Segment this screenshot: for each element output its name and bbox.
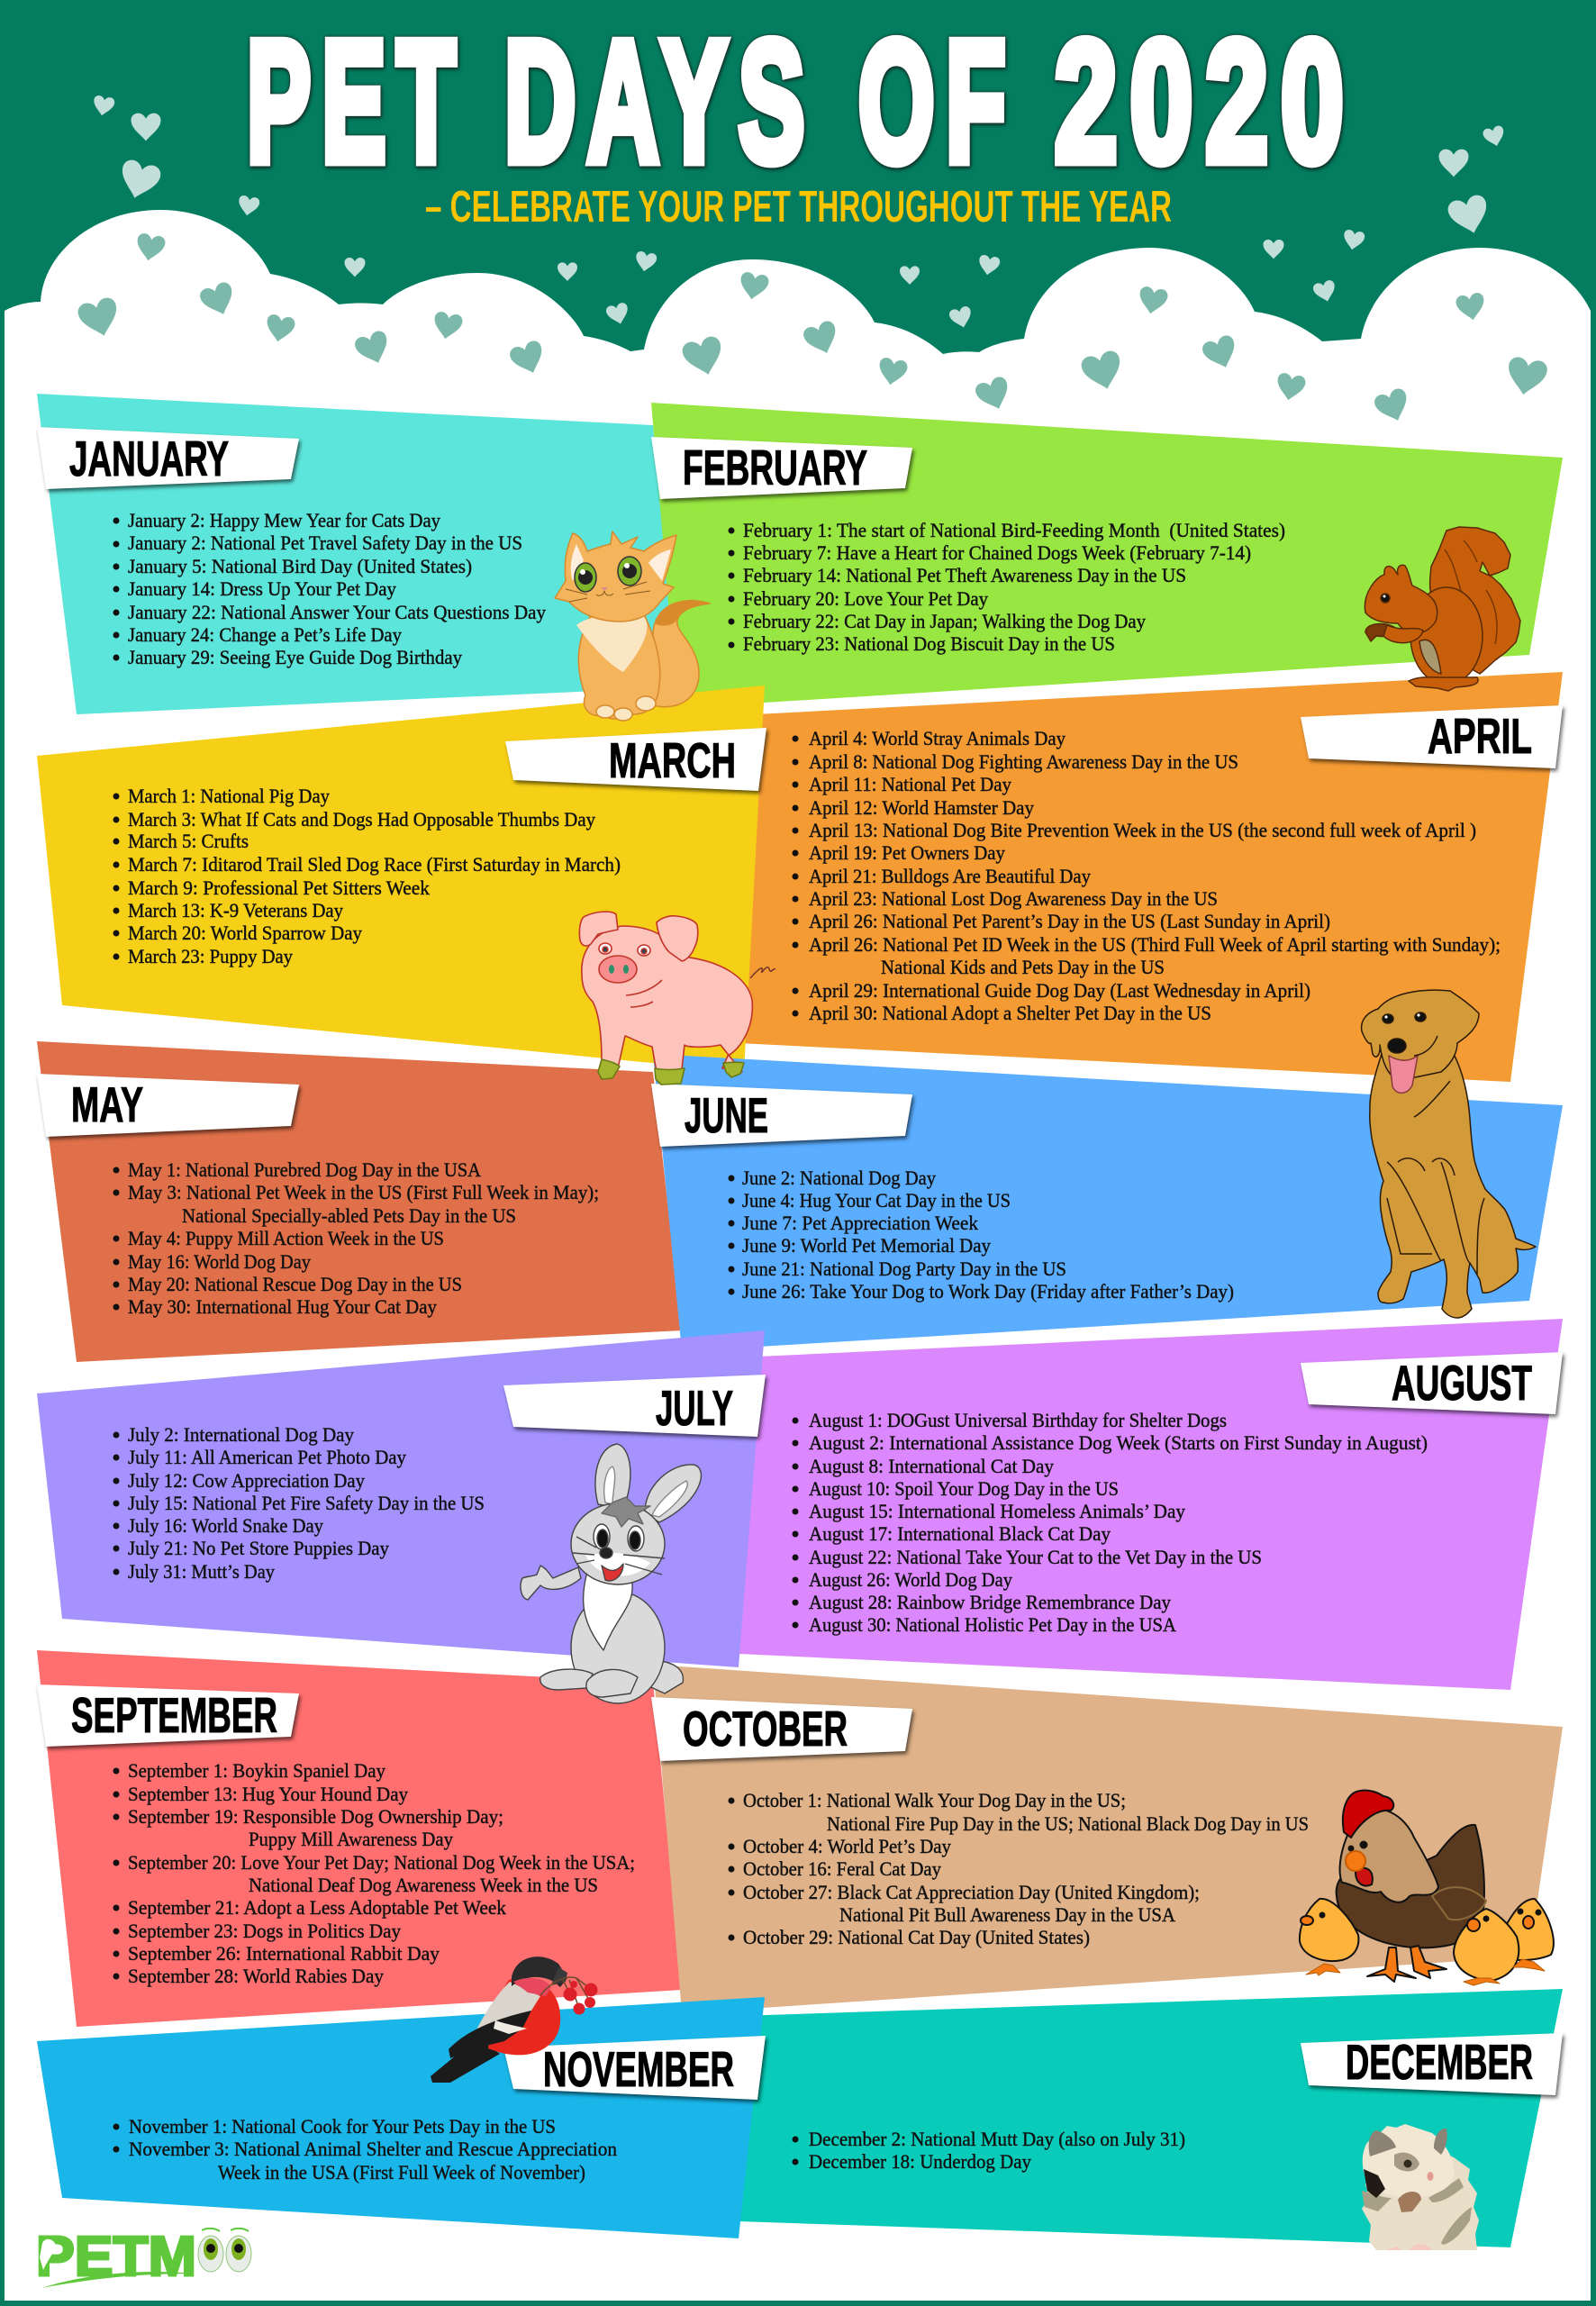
panel: November [37, 1997, 766, 2238]
list: June days: June 2: National Dog Day [742, 1167, 936, 1189]
panel: September [37, 1650, 682, 2027]
list: August days: August 26: World Dog Day [809, 1568, 1012, 1591]
heading: September: SEPTEMBER [71, 1687, 277, 1743]
icon: hen and chicks [1300, 1790, 1554, 1985]
list: September days: September 20: Love Your Pet Day; National Dog Week in the USA; [128, 1851, 635, 1874]
list: July days: July 2: International Dog Day [128, 1423, 354, 1446]
bullets [113, 1170, 119, 1307]
bullets [728, 1178, 735, 1292]
heading: August: AUGUST [1392, 1355, 1532, 1411]
list: March days: March 20: World Sparrow Day [128, 921, 362, 944]
list: July days: July 11: All American Pet Photo Day [128, 1446, 406, 1468]
list: January days: January 24: Change a Pet’s Life Day [128, 623, 402, 646]
icon: rabbit [521, 1444, 701, 1703]
icon: pig [579, 912, 775, 1085]
heading: April: APRIL [1428, 708, 1532, 764]
list: April days: April 26: National Pet ID Week in the US (Third Full Week of April starting with Sunday); [809, 933, 1501, 956]
list: September days [128, 1759, 635, 1987]
list: May days [128, 1158, 599, 1318]
title [247, 6, 1356, 197]
bullets [728, 1801, 735, 1938]
decorative hearts on white [76, 232, 1548, 426]
heading: May: MAY [71, 1076, 143, 1132]
bullets [113, 796, 119, 957]
heading: January: JANUARY [69, 431, 229, 486]
list: May days: May 4: Puppy Mill Action Week in the US [128, 1227, 444, 1249]
icon: hamster [1362, 2124, 1479, 2250]
list: February days: February 7: Have a Heart for Chained Dogs Week (February 7-14) [743, 541, 1251, 564]
list: October days: October 27: Black Cat Appreciation Day (United Kingdom); [743, 1881, 1200, 1903]
list: November days: November 3: National Animal Shelter and Rescue Appreciation [129, 2138, 617, 2160]
list: December days: December 18: Underdog Day [809, 2150, 1031, 2173]
list: April days: National Kids and Pets Day in the US [881, 956, 1165, 978]
list: March days [128, 785, 621, 967]
list: August days: August 10: Spoil Your Dog Day in the US [809, 1477, 1119, 1500]
panel: April [739, 672, 1563, 1082]
bullets [113, 521, 119, 658]
list: April days: April 21: Bulldogs Are Beautiful Day [809, 865, 1091, 887]
list: March days: March 7: Iditarod Trail Sled Dog Race (First Saturday in March) [128, 853, 621, 876]
list: April days: April 11: National Pet Day [809, 773, 1011, 795]
bullets [113, 1435, 119, 1572]
icon: squirrel [1365, 527, 1520, 691]
list: January days [128, 509, 546, 668]
panel: February [651, 403, 1563, 708]
list: April days: April 29: International Guide Dog Day (Last Wednesday in April) [809, 979, 1310, 1002]
list: September days: September 19: Responsible Dog Ownership Day; [128, 1805, 503, 1828]
panel: December [739, 1989, 1563, 2247]
heading: July: JULY [656, 1380, 733, 1436]
list: May days: May 16: World Dog Day [128, 1250, 311, 1273]
bullets [793, 1421, 798, 1625]
list: March days: March 23: Puppy Day [128, 945, 293, 967]
list: September days: National Deaf Dog Awareness Week in the US [249, 1874, 598, 1896]
list: June days: June 4: Hug Your Cat Day in the US [742, 1189, 1011, 1212]
list: January days: January 5: National Bird Day (United States) [128, 555, 472, 577]
list: August days: August 22: National Take Your Cat to the Vet Day in the US [809, 1546, 1262, 1568]
list: July days: July 15: National Pet Fire Safety Day in the US [128, 1492, 485, 1514]
list: September days: September 21: Adopt a Less Adoptable Pet Week [128, 1896, 506, 1919]
list: June days: June 21: National Dog Party Day in the US [742, 1257, 1066, 1280]
list: October days: October 29: National Cat Day (United States) [743, 1926, 1090, 1948]
bullets [793, 739, 798, 1013]
list: September days: September 1: Boykin Spaniel Day [128, 1759, 385, 1782]
list: May days: May 3: National Pet Week in the US (First Full Week in May); [128, 1181, 599, 1203]
list: April days: April 12: World Hamster Day [809, 796, 1034, 819]
list: April days: April 23: National Lost Dog Awareness Day in the US [809, 887, 1218, 910]
bullets [793, 2139, 798, 2162]
list: January days: January 14: Dress Up Your Pet Day [128, 577, 396, 600]
list: November days: November 1: National Cook for Your Pets Day in the US [129, 2115, 556, 2138]
list: March days: March 1: National Pig Day [128, 785, 330, 807]
list: October days: October 4: World Pet’s Day [743, 1835, 951, 1857]
list: April days: April 4: World Stray Animals Day [809, 727, 1066, 749]
panel: July [37, 1330, 766, 1667]
list: June days: June 7: Pet Appreciation Week [742, 1212, 978, 1234]
list: July days: July 21: No Pet Store Puppies Day [128, 1537, 389, 1559]
list: May days: May 30: International Hug Your Cat Day [128, 1295, 437, 1318]
title: 2020 [1055, 6, 1356, 197]
panel: January [37, 394, 677, 714]
list: January days: January 29: Seeing Eye Guide Dog Birthday [128, 646, 462, 668]
list: October days: National Fire Pup Day in the US; National Black Dog Day in US [827, 1812, 1309, 1835]
panel: October [651, 1665, 1563, 2013]
list: March days: March 13: K-9 Veterans Day [128, 899, 343, 921]
bullets [113, 1771, 119, 1976]
bullets [113, 2127, 119, 2149]
list: August days [809, 1409, 1428, 1636]
list: April days: April 19: Pet Owners Day [809, 841, 1005, 864]
list: December days: December 2: National Mutt Day (also on July 31) [809, 2128, 1185, 2150]
list: July days: July 12: Cow Appreciation Day [128, 1469, 365, 1492]
list: May days: May 1: National Purebred Dog Day in the USA [128, 1158, 481, 1181]
list: January days: January 22: National Answer Your Cats Questions Day [128, 601, 546, 623]
subtitle: – CELEBRATE YOUR PET THROUGHOUT THE YEAR [425, 183, 1172, 232]
list: November days: Week in the USA (First Full Week of November) [218, 2161, 585, 2183]
list: April days: April 30: National Adopt a Shelter Pet Day in the US [809, 1002, 1211, 1024]
list: April days: April 13: National Dog Bite Prevention Week in the US (the second full week of April ) [809, 819, 1476, 841]
list: August days: August 15: International Homeless Animals’ Day [809, 1500, 1185, 1522]
list: February days: February 1: The start of National Bird-Feeding Month (United States) [743, 519, 1285, 541]
heading: November: NOVEMBER [543, 2041, 734, 2097]
heading: February: FEBRUARY [683, 440, 867, 495]
list: September days: Puppy Mill Awareness Day [249, 1828, 453, 1850]
list: August days: August 1: DOGust Universal Birthday for Shelter Dogs [809, 1409, 1227, 1431]
icon: golden dog [1362, 990, 1536, 1318]
list: June days: June 9: World Pet Memorial Day [742, 1234, 991, 1257]
list: October days [743, 1789, 1309, 1948]
list: October days: National Pit Bull Awareness Day in the USA [839, 1903, 1175, 1926]
list: August days: August 30: National Holistic Pet Day in the USA [809, 1613, 1176, 1636]
icon: bullfinch bird [431, 1956, 598, 2083]
list: July days: July 31: Mutt’s Day [128, 1560, 275, 1583]
list: January days: January 2: National Pet Travel Safety Day in the US [128, 531, 522, 554]
list: November days [129, 2115, 617, 2183]
list: September days: September 28: World Rabies Day [128, 1965, 384, 1987]
list: September days: September 23: Dogs in Politics Day [128, 1920, 401, 1942]
title: PET [247, 6, 467, 197]
list: October days: October 16: Feral Cat Day [743, 1857, 941, 1880]
list: March days: March 3: What If Cats and Dogs Had Opposable Thumbs Day [128, 808, 595, 831]
list: May days: May 20: National Rescue Dog Day in the US [128, 1273, 462, 1295]
list: August days: August 17: International Black Cat Day [809, 1522, 1111, 1545]
decorative hearts on green [92, 95, 1507, 331]
list: August days: August 8: International Cat Day [809, 1455, 1054, 1477]
icon: orange cat [555, 531, 710, 721]
list: February days: February 20: Love Your Pet Day [743, 587, 988, 610]
list: June days [742, 1167, 1234, 1303]
list: July days: July 16: World Snake Day [128, 1514, 323, 1537]
list: September days: September 26: International Rabbit Day [128, 1942, 440, 1965]
panel: March [37, 685, 766, 1072]
heading: June: JUNE [685, 1087, 768, 1143]
logo: Petmoo: PETM [36, 2226, 196, 2288]
list: March days: March 9: Professional Pet Sitters Week [128, 876, 430, 899]
list: April days [809, 727, 1501, 1024]
list: June days: June 26: Take Your Dog to Work Day (Friday after Father’s Day) [742, 1280, 1234, 1303]
list: August days: August 2: International Assistance Dog Week (Starts on First Sunday in August) [809, 1431, 1428, 1454]
list: February days: February 23: National Dog Biscuit Day in the US [743, 632, 1115, 655]
list: April days: April 8: National Dog Fighting Awareness Day in the US [809, 750, 1238, 773]
list: February days: February 22: Cat Day in Japan; Walking the Dog Day [743, 610, 1146, 632]
list: February days [743, 519, 1285, 655]
title: OF [858, 6, 1017, 197]
heading: March: MARCH [609, 732, 736, 788]
list: October days: October 1: National Walk Your Dog Day in the US; [743, 1789, 1126, 1811]
list: December days [809, 2128, 1185, 2173]
list: September days: September 13: Hug Your Hound Day [128, 1783, 408, 1805]
list: August days: August 28: Rainbow Bridge Remembrance Day [809, 1591, 1171, 1613]
list: February days: February 14: National Pet Theft Awareness Day in the US [743, 564, 1186, 586]
panel: June [651, 1054, 1563, 1351]
bullets [728, 531, 735, 645]
title: DAYS [504, 6, 816, 197]
list: May days: National Specially-abled Pets Day in the US [182, 1204, 516, 1227]
list: July days [128, 1423, 485, 1583]
panel: May [37, 1041, 682, 1362]
heading: October: OCTOBER [683, 1701, 848, 1757]
panel: August [739, 1319, 1563, 1690]
list: April days: April 26: National Pet Parent’s Day in the US (Last Sunday in April) [809, 910, 1330, 932]
list: January days: January 2: Happy Mew Year for Cats Day [128, 509, 440, 531]
list: March days: March 5: Crufts [128, 830, 249, 852]
